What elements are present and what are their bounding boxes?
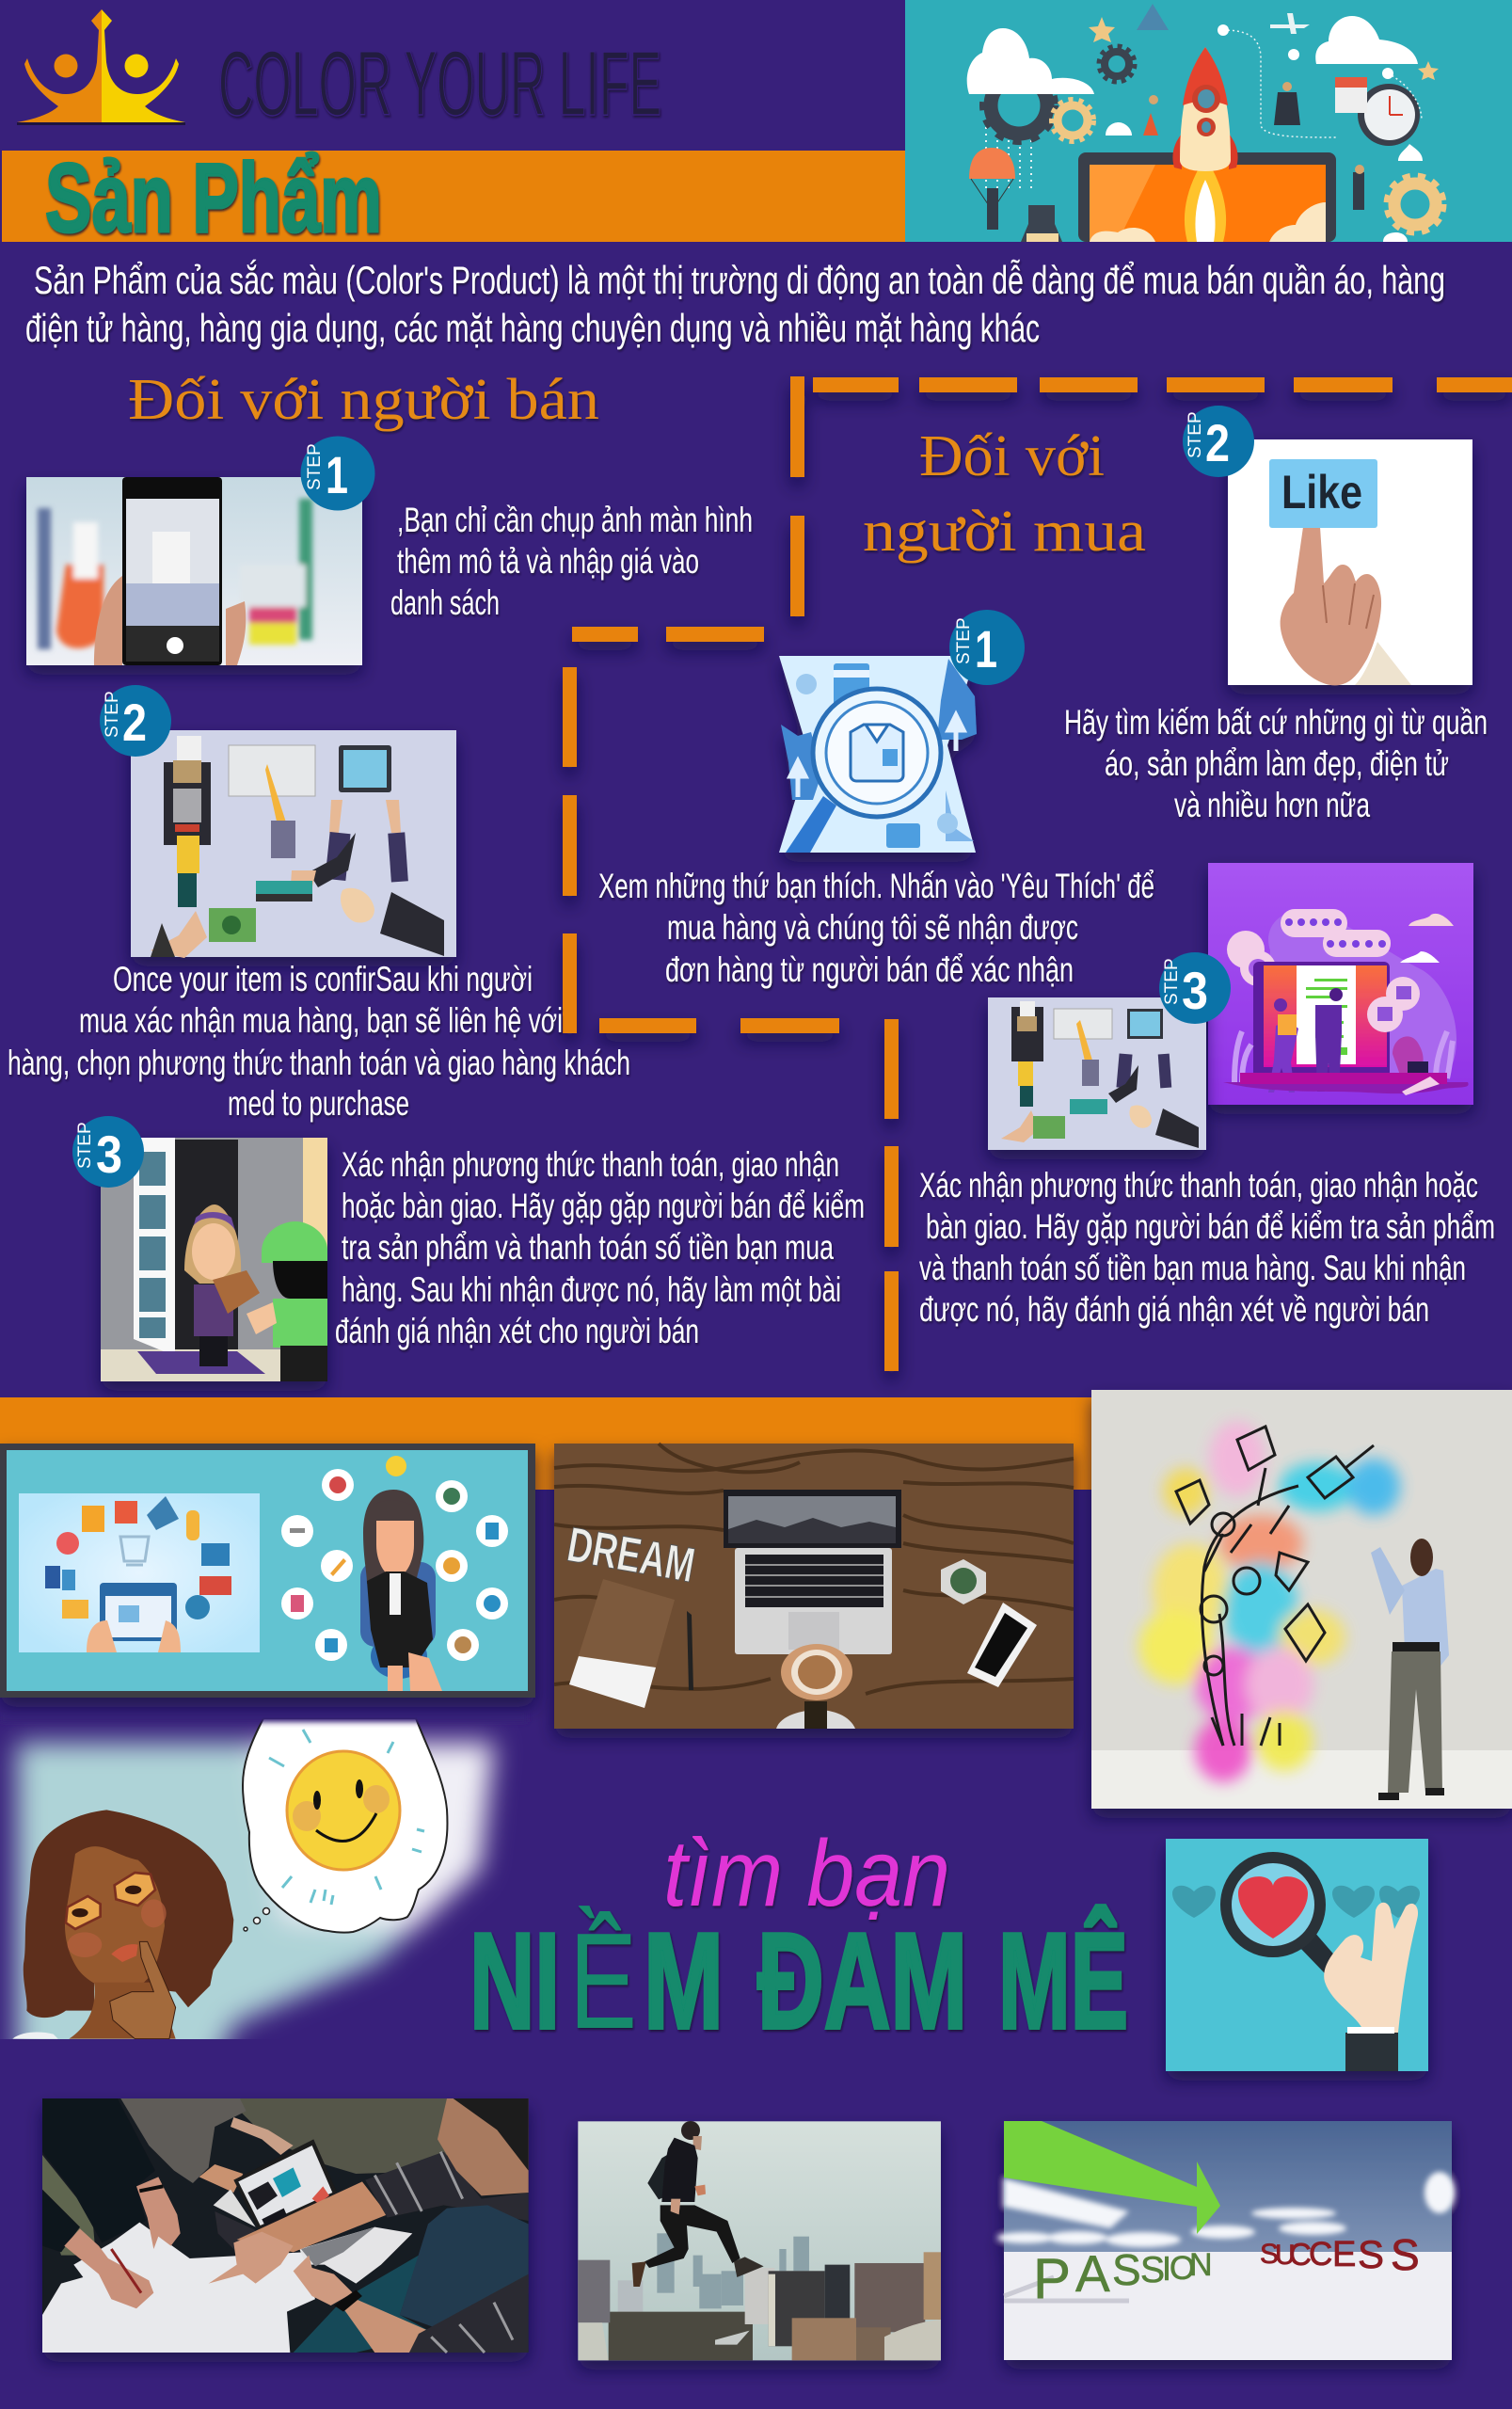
buyer step 1 text: đơn hàng từ người bán để xác nhận	[665, 950, 1074, 989]
orange band behind gallery	[0, 1397, 1091, 1490]
seller step 1 badge: STEP	[305, 443, 325, 490]
photo: passion to success arrow: N	[1189, 2247, 1213, 2283]
buyer step 3 card: review and rating illustration	[1208, 863, 1473, 1105]
buyer step 3 text	[919, 1166, 1495, 1329]
photo: passion to success arrow: O	[1170, 2250, 1195, 2287]
seller step 3 badge: STEP	[75, 1122, 95, 1169]
seller step 2 text: med to purchase	[228, 1084, 409, 1123]
buyer step 3 badge: 3	[1182, 961, 1208, 1020]
seller step 1 text: thêm mô tả và nhập giá vào	[397, 542, 699, 581]
headline: find your passion: ĐAM	[757, 1905, 967, 2057]
buyer step 1 text	[598, 867, 1154, 989]
photo: passion to success arrow: C	[1309, 2236, 1332, 2273]
gallery: businessman sketching colourful ideas on wall	[1091, 1390, 1512, 1809]
photo: passion to success arrow: I	[1162, 2249, 1171, 2288]
headline: find your passion: M	[644, 1905, 724, 2057]
buyer step 1 text: mua hàng và chúng tôi sẽ nhận được	[667, 908, 1078, 947]
logo: crown	[17, 9, 185, 125]
buyer step 2 badge	[1183, 406, 1254, 477]
buyer step 1 icon: shopping magnifier with shirt	[779, 656, 977, 853]
seller step 2 badge: STEP	[103, 691, 122, 738]
photo: passion to success arrow: S	[1358, 2232, 1384, 2276]
heart under magnifier card	[1166, 1839, 1428, 2071]
photo: passion to success arrow: S	[1112, 2245, 1141, 2294]
photo: passion to success arrow: C	[1289, 2237, 1312, 2272]
headline: find your passion	[470, 1821, 1128, 2057]
photo: man leaping over city	[578, 2121, 941, 2360]
gallery: online shopping board	[0, 1444, 535, 1698]
buyer step 2 text	[1064, 703, 1488, 824]
seller step 2 text: hàng, chọn phương thức thanh toán và giao hàng khách	[8, 1044, 630, 1082]
photo: passion to success arrow: A	[1075, 2244, 1110, 2303]
buyer step 1 badge: 1	[975, 619, 997, 678]
headline: find your passion: MÊ	[998, 1905, 1128, 2057]
seller step 2 text: Once your item is confirSau khi người	[113, 960, 533, 998]
buyer step 1 badge: STEP	[954, 617, 974, 664]
photo: passion to success arrow: S	[1391, 2230, 1420, 2279]
photo: teamwork around laptop	[42, 2098, 529, 2353]
heading: for buyers	[863, 424, 1146, 564]
heading: for buyers: Đối với	[919, 424, 1105, 488]
seller step 1 photo: phone photographing lab flasks	[26, 477, 362, 665]
seller step 2 image: payment methods	[131, 730, 456, 958]
section band: Sản Phẩm: Sản Phẩm	[45, 144, 382, 253]
headline: find your passion: tìm bạn	[663, 1821, 950, 1926]
intro paragraph	[25, 258, 1445, 350]
buyer step 1 text: Xem những thứ bạn thích. Nhấn vào 'Yêu Thích' để	[598, 867, 1154, 905]
section band: Sản Phẩm	[2, 144, 905, 253]
seller step 1 badge	[301, 437, 374, 510]
seller step 3 image: parcel delivery at door	[101, 1138, 327, 1381]
heading: for sellers: Đối với người bán	[128, 368, 599, 432]
intro paragraph: điện tử hàng, hàng gia dụng, các mặt hàng chuyện dụng và nhiều mặt hàng khác	[25, 306, 1040, 350]
buyer step 2 card: finger pressing Like	[1228, 439, 1472, 685]
photo: passion to success arrow: U	[1275, 2240, 1296, 2271]
buyer step 3 card: payment methods	[988, 997, 1206, 1150]
buyer step 1 badge	[949, 610, 1025, 685]
logo wordmark: COLOR YOUR LIFE	[218, 32, 661, 135]
seller step 3 badge: 3	[96, 1125, 122, 1184]
seller step 3 badge	[72, 1116, 144, 1188]
buyer step 2 card: finger pressing Like: Like	[1281, 466, 1362, 518]
seller step 2 badge	[100, 685, 171, 757]
illustration: woman thinking of smiling egg	[0, 1718, 514, 2039]
photo: passion to success arrow: S	[1260, 2239, 1279, 2270]
seller step 1 text: danh sách	[390, 583, 500, 622]
buyer step 3 badge: STEP	[1162, 958, 1182, 1005]
seller step 2 text: mua xác nhận mua hàng, bạn sẽ liên hệ với	[79, 1001, 563, 1040]
headline: find your passion: Ề	[569, 1905, 637, 2057]
photo: passion to success arrow: S	[1140, 2250, 1165, 2290]
seller step 1 badge: 1	[326, 445, 348, 504]
photo: passion to success arrow	[997, 2121, 1455, 2360]
seller step 3 text: tra sản phẩm và thanh toán số tiền bạn mua	[342, 1228, 834, 1267]
seller step 2 text	[8, 960, 630, 1123]
header illustration: rocket launching from laptop	[905, 0, 1512, 242]
seller step 1 text: ,Bạn chỉ cần chụp ảnh màn hình	[397, 501, 753, 539]
heading: for buyers: người mua	[863, 500, 1146, 564]
gallery: laptop on wooden desk photo	[554, 1444, 1074, 1729]
seller step 3 text: đánh giá nhận xét cho người bán	[335, 1312, 699, 1350]
seller step 3 text: hàng. Sau khi nhận được nó, hãy làm một bài	[342, 1270, 841, 1309]
seller step 1 text	[390, 501, 753, 622]
seller step 3 text: hoặc bàn giao. Hãy gặp gặp người bán để kiểm	[342, 1187, 865, 1225]
seller step 3 text	[335, 1145, 865, 1350]
buyer step 2 badge: 2	[1205, 413, 1230, 472]
seller step 2 badge: 2	[122, 693, 147, 752]
seller step 3 text: Xác nhận phương thức thanh toán, giao nhận	[342, 1145, 839, 1184]
dashed route connector	[563, 376, 1512, 1371]
buyer step 3 badge	[1159, 952, 1231, 1024]
photo: passion to success arrow: E	[1332, 2235, 1356, 2274]
buyer step 2 badge: STEP	[1186, 411, 1205, 458]
gallery: laptop on wooden desk photo: DREAM	[564, 1518, 699, 1593]
photo: passion to success arrow: P	[1033, 2247, 1071, 2310]
headline: find your passion: NI	[470, 1905, 560, 2057]
buyer step 2 text: và nhiều hơn nữa	[1174, 786, 1370, 824]
